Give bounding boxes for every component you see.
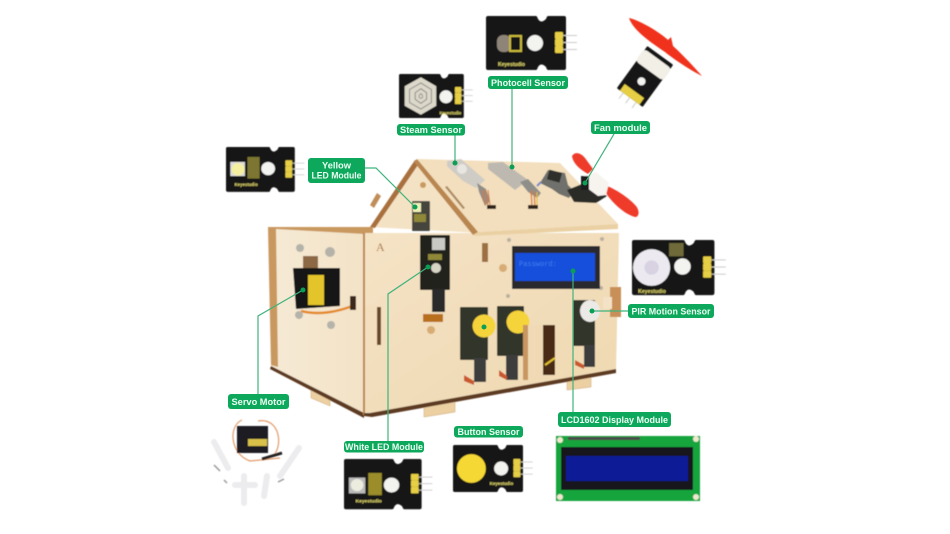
yellow LED on gable [412, 201, 430, 231]
module: LCD1602 display [556, 436, 700, 501]
slit [482, 243, 488, 262]
label: LCD1602 Display Module: LCD1602 Display Module [561, 415, 668, 426]
label: Fan module: Fan module [594, 123, 647, 134]
roof vent slot [445, 186, 465, 209]
module: steam [399, 74, 473, 118]
engraved wall letter: A [376, 240, 385, 254]
PIR module on front [573, 300, 600, 369]
base edge [364, 369, 616, 417]
door opening [523, 325, 555, 380]
LCD on front [512, 246, 600, 289]
module: PIR: Keyestudio [638, 289, 666, 295]
label: Button Sensor: Button Sensor [458, 427, 520, 438]
module: photocell [486, 16, 577, 70]
module: white LED: Keyestudio [356, 499, 382, 505]
module: photocell: Keyestudio [498, 62, 525, 68]
LCD on front: Password: [519, 261, 557, 269]
label: Steam Sensor: Steam Sensor [400, 125, 462, 136]
fan on roof [567, 153, 639, 217]
button module left [460, 307, 496, 385]
label: PIR Motion Sensor: PIR Motion Sensor [632, 306, 711, 318]
module: steam: Keyestudio [440, 111, 462, 116]
label: Photocell Sensor: Photocell Sensor [491, 78, 565, 89]
leader dots [300, 160, 594, 330]
roof panel [417, 159, 618, 232]
servo on side wall [293, 244, 356, 329]
label: Servo Motor: Servo Motor [232, 397, 286, 408]
label: Yellow LED Module: LED Module [312, 170, 362, 182]
module: yellow LED: Keyestudio [235, 182, 258, 187]
button module right [497, 306, 530, 380]
module: yellow LED [226, 147, 304, 192]
house feet [311, 375, 591, 417]
module: fan with propeller [612, 18, 702, 113]
servo motor kit [214, 420, 299, 503]
illustration: wooden smart home [268, 153, 639, 418]
label: White LED Module: White LED Module [345, 442, 423, 453]
front wall bolts [506, 237, 604, 298]
front wall [363, 233, 619, 414]
gable hole [420, 182, 426, 188]
label: Servo Motor [228, 394, 289, 409]
sensor boards [214, 16, 726, 509]
side tab [366, 306, 381, 346]
label: Yellow LED Module [308, 158, 365, 183]
side wall [268, 228, 365, 415]
roof mounted photocell sensor [488, 162, 541, 209]
rear gable [371, 159, 480, 233]
engraved holes [427, 264, 507, 334]
white LED module on front [420, 235, 450, 322]
label: Yellow LED Module: Yellow [322, 160, 352, 172]
roof mounted module [537, 170, 574, 198]
module: button [453, 445, 533, 492]
module: button: Keyestudio [490, 481, 514, 486]
roof mounted steam sensor [447, 159, 496, 209]
leader lines [258, 89, 628, 441]
module: white LED [344, 459, 432, 509]
right tab [603, 287, 621, 317]
module: PIR [632, 240, 726, 295]
